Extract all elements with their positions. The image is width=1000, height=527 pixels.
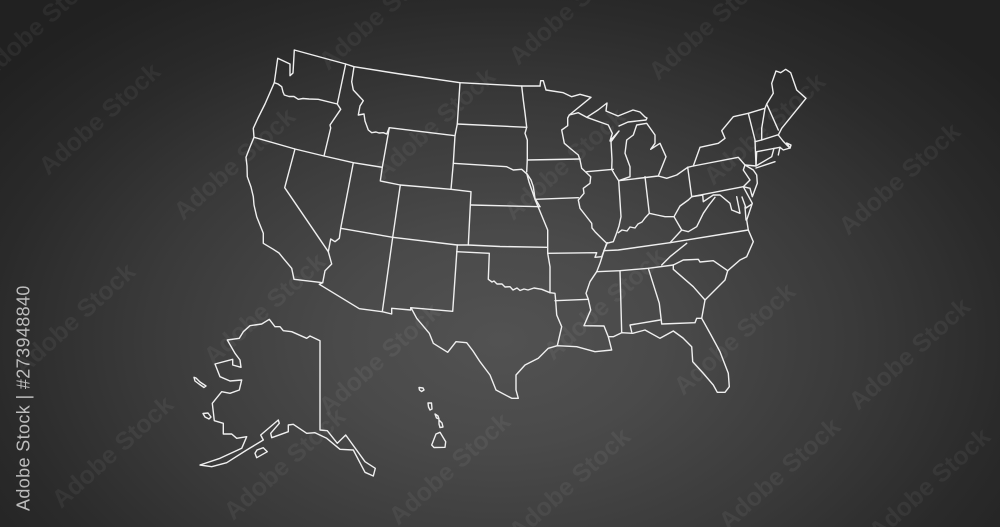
watermark pattern: Adobe Stock xyxy=(499,102,631,226)
watermark pattern: Adobe Stock xyxy=(169,102,301,226)
watermark pattern: Adobe Stock xyxy=(844,292,976,416)
Hawaii xyxy=(419,388,446,448)
watermark pattern: Adobe Stock xyxy=(199,247,331,371)
watermark pattern: Adobe Stock xyxy=(384,407,516,527)
contiguous states: northeast xyxy=(682,69,806,232)
watermark pattern: Adobe Stock xyxy=(699,67,831,191)
contiguous states: west xyxy=(246,50,547,314)
watermark pattern: Adobe Stock xyxy=(314,297,446,421)
contiguous states: midwest and great lakes xyxy=(527,81,692,257)
watermark pattern: Adobe Stock xyxy=(34,57,166,181)
map: United States outline xyxy=(194,50,806,476)
watermark pattern: Adobe Stock xyxy=(47,390,179,514)
watermark pattern: Adobe Stock xyxy=(369,62,501,186)
contiguous states: south xyxy=(411,220,753,398)
watermark pattern: Adobe Stock xyxy=(219,402,351,526)
image credit: Adobe Stock | #273948840 xyxy=(14,285,34,511)
watermark pattern: Adobe Stock xyxy=(539,242,671,366)
watermark pattern: Adobe Stock xyxy=(9,257,141,381)
Alaska xyxy=(194,319,375,476)
watermark pattern: Adobe Stock xyxy=(669,277,801,401)
watermark pattern: Adobe Stock xyxy=(834,117,966,241)
